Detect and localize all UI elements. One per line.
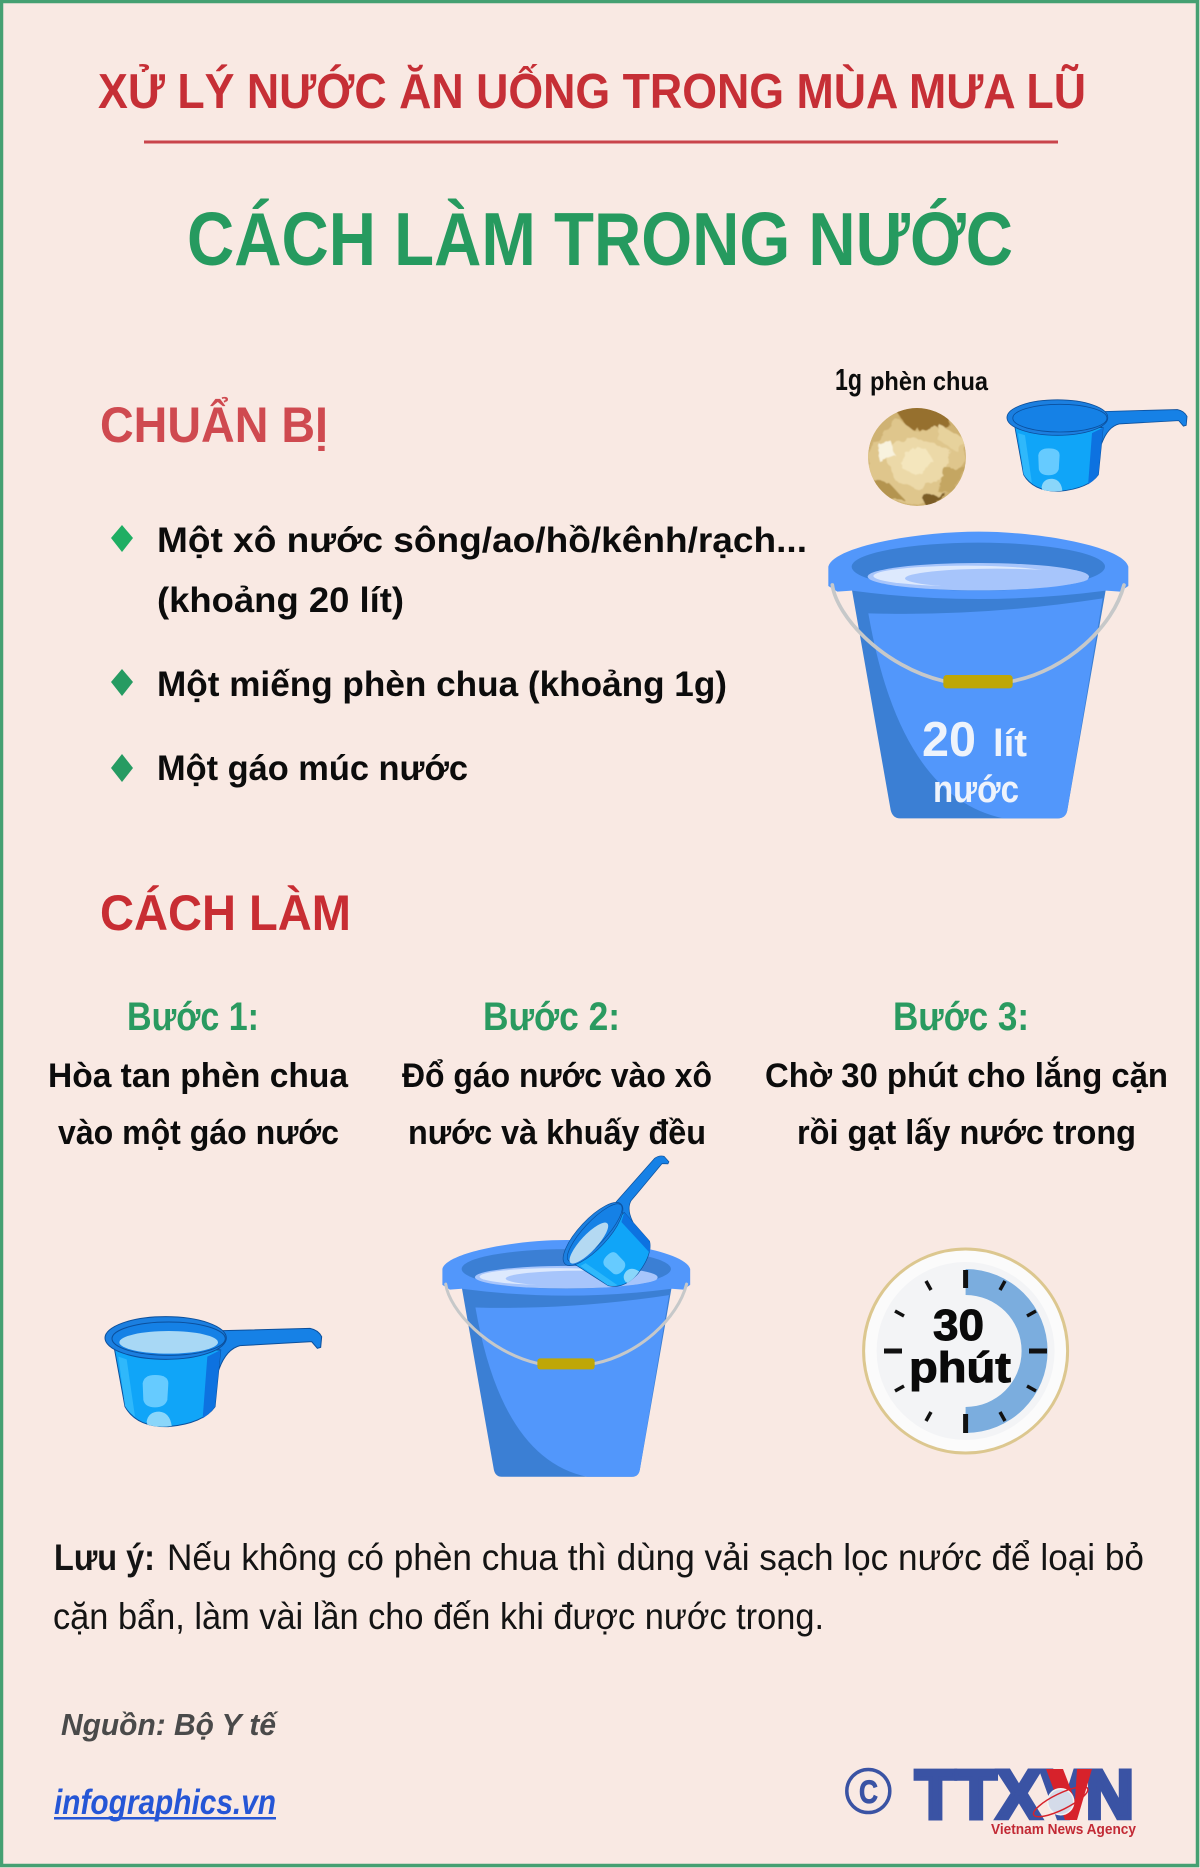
logo wordmark: TTXVN xyxy=(915,1756,1134,1833)
logo red V and globe xyxy=(1030,1769,1092,1822)
panel: preparation xyxy=(100,397,807,788)
icon: 30 minute timer: 30 xyxy=(933,1301,984,1350)
label: 1g phèn chua: 1g xyxy=(835,362,862,397)
note text block: cặn bẩn, làm vài lần cho đến khi được nước trong. xyxy=(53,1596,824,1637)
logo tagline: Vietnam News Agency xyxy=(991,1822,1136,1838)
bucket label: lít xyxy=(993,723,1027,765)
title: main heading: XỬ LÝ NƯỚC ĂN UỐNG TRONG MÙA MƯA LŨ xyxy=(98,64,1086,119)
panel: step 3 xyxy=(765,995,1168,1453)
list item 3: Một gáo múc nước xyxy=(157,749,468,788)
bucket label: nước xyxy=(933,769,1019,811)
heading: chuẩn bị: CHUẨN BỊ xyxy=(100,397,328,453)
bucket label xyxy=(922,713,1027,811)
note text block: Nếu không có phèn chua thì dùng vải sạch lọc nước để loại bỏ xyxy=(167,1537,1144,1578)
step 1 description xyxy=(48,1057,349,1152)
icon: tilted ladle xyxy=(555,1147,709,1305)
list item 2: Một miếng phèn chua (khoảng 1g) xyxy=(157,665,727,704)
step 3 description: Chờ 30 phút cho lắng cặn xyxy=(765,1057,1168,1095)
list item 1: Một xô nước sông/ao/hồ/kênh/rạch... xyxy=(157,521,807,560)
step 1 description: vào một gáo nước xyxy=(58,1114,339,1152)
icon: alum crystal xyxy=(868,405,968,508)
icon: copyright mark xyxy=(847,1770,890,1812)
icon: diamond bullet xyxy=(111,754,133,782)
step 3 description xyxy=(765,1057,1168,1152)
icon: ladle with water xyxy=(105,1317,322,1427)
icon: copyright mark: C xyxy=(859,1774,878,1810)
icon: large bucket with 20 litres xyxy=(828,532,1128,818)
icon: 30 minute timer: phút xyxy=(909,1344,1011,1392)
logo: TTXVN copyright xyxy=(847,1756,1136,1838)
heading: cách làm: CÁCH LÀM xyxy=(100,885,351,941)
note text block: Lưu ý: xyxy=(54,1537,155,1578)
icon: diamond bullet xyxy=(111,669,133,696)
list item 1: (khoảng 20 lít) xyxy=(157,581,404,620)
step 2 description xyxy=(402,1057,712,1152)
step 2 heading: Bước 2: xyxy=(483,995,620,1039)
title: sub heading: CÁCH LÀM TRONG NƯỚC xyxy=(187,197,1013,281)
panel: step 2 xyxy=(402,995,712,1477)
label: 1g phèn chua xyxy=(835,362,988,397)
step 3 heading: Bước 3: xyxy=(893,995,1029,1039)
icon: 30 minute timer xyxy=(864,1249,1068,1453)
step 3 description: rồi gạt lấy nước trong xyxy=(797,1114,1136,1152)
panel: step 1 xyxy=(48,995,349,1427)
step 2 description: Đổ gáo nước vào xô xyxy=(402,1057,712,1095)
step 2 description: nước và khuấy đều xyxy=(408,1114,706,1152)
icon: water ladle xyxy=(1007,400,1187,491)
website link: infographics.vn xyxy=(54,1783,276,1822)
source text: Nguồn: Bộ Y tế xyxy=(61,1707,279,1742)
icon: diamond bullet xyxy=(111,525,133,552)
note text block xyxy=(53,1537,1144,1637)
list item 1 xyxy=(111,521,807,620)
label: 1g phèn chua: phèn chua xyxy=(870,366,988,396)
step 1 heading: Bước 1: xyxy=(127,995,259,1039)
icon: bucket xyxy=(442,1240,690,1477)
bucket label: 20 xyxy=(922,713,976,767)
step 1 description: Hòa tan phèn chua xyxy=(48,1057,349,1095)
